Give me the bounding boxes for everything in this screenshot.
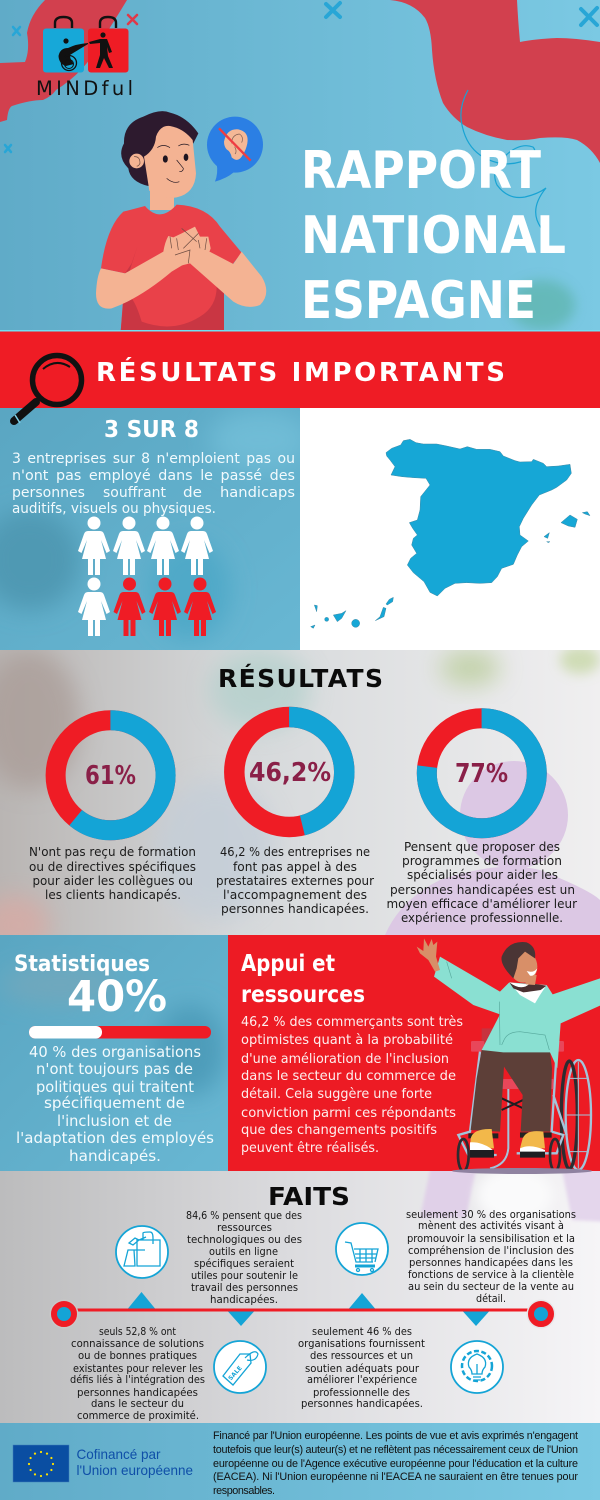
title: RAPPORT NATIONAL ESPAGNE	[301, 141, 566, 331]
pictogram: eight people, three red	[78, 516, 216, 636]
text: seulement 46 %: des ressources et un	[310, 1350, 413, 1362]
caption: 61%: N'ont pas reçu de formation	[29, 845, 196, 859]
header panel	[0, 0, 600, 331]
caption: 46,2%: l'accompagnement des	[223, 888, 367, 902]
text: disclaimer: toutefois que leur(s) auteur(s) et ne reflètent pas nécessairement ceux de l'Union	[213, 1444, 578, 1456]
person	[96, 111, 266, 332]
donut chart: 61%: 61%	[85, 761, 136, 791]
text: seulement 46 %: seulement 46 % des	[312, 1326, 412, 1338]
title: RAPPORT NATIONAL ESPAGNE: ESPAGNE	[301, 271, 536, 331]
text: seulement 30 %: promouvoir la sensibilisation et la	[407, 1233, 575, 1245]
icon: shopping cart	[336, 1223, 388, 1275]
text: seuls 52,8 %	[70, 1326, 205, 1422]
illustration: person in wheelchair	[417, 938, 600, 1171]
text: seulement 46 %	[298, 1326, 425, 1410]
heading: statistiques: Statistiques	[14, 952, 150, 977]
text: 40 % des organisations: handicapés.	[69, 1147, 161, 1165]
text: 84,6 %: spécifiques seraient	[194, 1258, 294, 1270]
text: 46,2 % des commerçants	[241, 1014, 463, 1156]
donut chart: 46,2%: 46,2%	[249, 758, 331, 788]
icon: shopping bags	[116, 1226, 168, 1278]
banner: résultats importants	[0, 330, 600, 408]
panel: appui et ressources	[228, 935, 600, 1171]
panel: faits	[0, 1160, 600, 1423]
caption: 77%: expérience professionnelle.	[401, 911, 563, 925]
caption: 46,2%: personnes handicapées.	[221, 902, 369, 916]
caption: 46,2%: 46,2 % des entreprises ne	[220, 845, 370, 859]
text: seulement 46 %: améliorer l'expérience	[307, 1374, 417, 1386]
donut chart: 77%: 77%	[455, 759, 508, 789]
wheelchair shadow	[452, 1168, 592, 1174]
text: 3 entreprises: handicaps	[220, 485, 295, 501]
caption: 61%	[29, 845, 196, 902]
panel: statistiques	[0, 935, 228, 1171]
caption: 46,2%: font pas appel à des	[233, 860, 357, 874]
text: seuls 52,8 %: seuls 52,8 % ont	[99, 1326, 176, 1338]
illustration: person signing with deaf icon	[96, 111, 266, 332]
text: disclaimer	[213, 1430, 578, 1497]
text: 3 entreprises	[12, 451, 295, 517]
caption: 46,2%: prestataires externes pour	[216, 874, 374, 888]
text: 40 % des organisations: l'adaptation des employés	[16, 1129, 214, 1147]
EU flag	[13, 1445, 69, 1482]
caption: 61%: ou de directives spécifiques	[29, 860, 196, 874]
text: 84,6 %: technologiques ou des	[187, 1234, 302, 1246]
number: 40%: 40%	[67, 972, 167, 1022]
text: seuls 52,8 %: dans le secteur du	[91, 1398, 184, 1410]
heading: faits: FAITS	[268, 1182, 350, 1211]
text: seuls 52,8 %: connaissance de solutions	[71, 1338, 204, 1350]
heading: appui et ressources: Appui et	[241, 951, 335, 977]
text: 3 entreprises: souffrant	[103, 485, 167, 501]
caption: 77%	[386, 840, 577, 925]
text: seulement 46 %: organisations fournissent	[298, 1338, 425, 1350]
icon: magnifying glass	[14, 356, 82, 423]
caption: 61%: pour aider les collègues ou	[32, 874, 193, 888]
text: 84,6 %: 84,6 % pensent que des	[186, 1210, 302, 1222]
text: 84,6 %: travail des personnes	[191, 1282, 298, 1294]
text: seulement 46 %: personnes handicapées.	[301, 1398, 423, 1410]
caption: 77%: moyen efficace d'améliorer leur	[386, 897, 577, 911]
text: disclaimer: Financé par l'Union européenne. Les points de vue et avis exprimés n'engagent	[213, 1430, 578, 1442]
text: seulement 30 %: personnes handicapées dans les	[409, 1257, 573, 1269]
text: cofinancé par l'Union européenne: l'Union européenne	[76, 1462, 193, 1478]
icon: sale tag	[214, 1341, 266, 1393]
text: seulement 46 %: soutien adéquats pour	[305, 1363, 420, 1375]
text: seuls 52,8 %: défis liés à l'intégration des	[70, 1374, 205, 1386]
text: 3 entreprises: auditifs, visuels ou physiques.	[12, 501, 216, 517]
heading: 3 sur 8: 3 SUR 8	[104, 417, 199, 443]
text: seulement 30 %: compréhension de l'inclusion des	[408, 1245, 574, 1257]
text: 46,2 % des commerçants: que des changements positifs	[241, 1123, 437, 1138]
text: 46,2 % des commerçants: détail. Cela suggère une forte	[241, 1086, 432, 1102]
text: seulement 30 %: seulement 30 % des organisations	[406, 1209, 576, 1221]
title: RAPPORT NATIONAL ESPAGNE: NATIONAL	[301, 206, 566, 266]
text: disclaimer: européenne ou de l'Agence exécutive européenne pour l'éducation et la culture	[213, 1458, 578, 1470]
text: 3 entreprises: 3 entreprises sur 8 n'emploient pas ou	[12, 451, 295, 467]
text: 40 % des organisations: spécifiquement de	[44, 1094, 185, 1112]
caption: 46,2%	[216, 845, 374, 916]
text: 3 entreprises: n'ont pas employé dans le passé des	[12, 468, 295, 484]
text: seulement 46 %: professionnelle des	[313, 1387, 410, 1399]
donut chart: 61%	[56, 720, 166, 830]
text: seuls 52,8 %: existantes pour relever les	[73, 1363, 203, 1375]
icon: crossed-out ear speech bubble	[207, 117, 263, 182]
icon: sale tag: SALE	[227, 1365, 244, 1382]
text: 46,2 % des commerçants: peuvent être réalisés.	[241, 1140, 379, 1156]
text: 40 % des organisations: politiques qui traitent	[36, 1078, 194, 1096]
footer panel	[0, 1423, 600, 1500]
text: seuls 52,8 %: ou de bonnes pratiques	[78, 1350, 197, 1362]
text: seuls 52,8 %: personnes handicapées	[77, 1387, 198, 1399]
text: 46,2 % des commerçants: d'une amélioration de l'inclusion	[241, 1051, 449, 1067]
text: 40 % des organisations	[16, 1043, 214, 1165]
text: seulement 30 %: fonctions de service à la clientèle	[408, 1269, 574, 1281]
donut chart: 77%	[427, 718, 537, 828]
caption: 77%: programmes de formation	[402, 854, 562, 868]
panel: map of Spain	[302, 408, 600, 650]
text: seulement 30 %: au sein du secteur de la vente au	[408, 1281, 574, 1293]
text: 3 entreprises: de	[183, 485, 202, 501]
text: 46,2 % des commerçants: optimistes quant à la probabilité	[241, 1032, 453, 1048]
text: 46,2 % des commerçants: 46,2 % des commerçants sont très	[241, 1014, 463, 1030]
logo: MINDful: MINDful	[36, 77, 133, 100]
text: 84,6 %	[186, 1210, 302, 1306]
text: 46,2 % des commerçants: dans le secteur du commerce de	[241, 1069, 456, 1084]
text: 84,6 %: outils en ligne	[209, 1246, 278, 1258]
text: seulement 30 %: détail.	[476, 1293, 506, 1305]
text: 46,2 % des commerçants: conviction parmi ces répondants	[241, 1105, 456, 1121]
caption: 77%: personnes handicapées est un	[390, 883, 575, 897]
logo: MINDful	[36, 17, 133, 100]
text: 84,6 %: handicapées.	[210, 1294, 278, 1306]
text: disclaimer: responsables.	[213, 1485, 275, 1497]
text: seulement 30 %: mènent des activités visant à	[418, 1220, 564, 1232]
text: 3 entreprises: personnes	[12, 485, 85, 501]
donut chart: 46,2%	[234, 717, 344, 827]
text: disclaimer: (EACEA). Ni l'Union européenne ni l'EACEA ne sauraient en être tenues pour	[213, 1471, 578, 1483]
text: cofinancé par l'Union européenne	[76, 1446, 193, 1478]
text: 40 % des organisations: 40 % des organisations	[29, 1043, 201, 1061]
text: 40 % des organisations: n'ont toujours pas de	[36, 1060, 193, 1078]
text: 84,6 %: ressources	[217, 1222, 272, 1234]
heading: appui et ressources: ressources	[241, 982, 365, 1008]
caption: 61%: les clients handicapés.	[45, 888, 181, 902]
banner: résultats importants: RÉSULTATS IMPORTANTS	[96, 356, 505, 388]
caption: 77%: spécialisés pour aider les	[407, 868, 558, 882]
panel: résultats	[0, 646, 600, 955]
text: 40 % des organisations: l'inclusion et de	[57, 1112, 172, 1130]
timeline	[50, 1292, 556, 1328]
caption: 77%: Pensent que proposer des	[404, 840, 560, 854]
icon: light bulb gear	[451, 1341, 503, 1393]
text: cofinancé par l'Union européenne: Cofinancé par	[76, 1446, 161, 1462]
title: RAPPORT NATIONAL ESPAGNE: RAPPORT	[301, 141, 541, 201]
panel: 3 sur 8	[0, 408, 310, 650]
progress bar: 40%	[29, 1026, 211, 1038]
text: seulement 30 %	[406, 1209, 576, 1305]
text: seuls 52,8 %: commerce de proximité.	[77, 1410, 199, 1422]
heading: résultats: RÉSULTATS	[218, 664, 383, 693]
heading: appui et ressources	[241, 951, 365, 1008]
text: 84,6 %: utiles pour soutenir le	[191, 1270, 298, 1282]
